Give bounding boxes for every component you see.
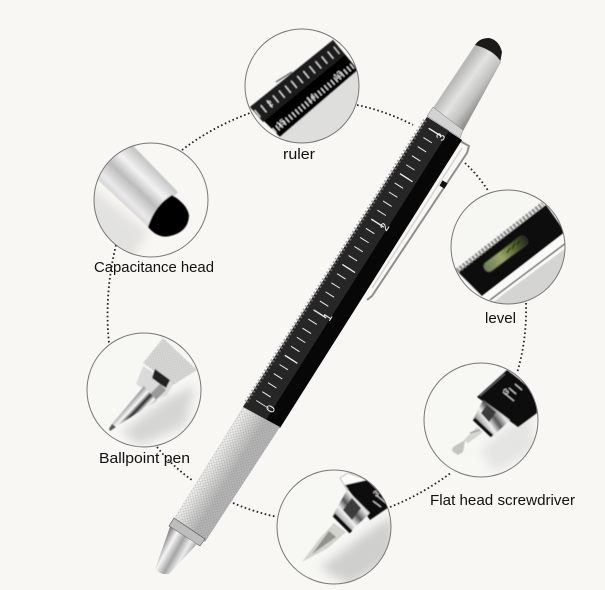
inset: level — [450, 190, 566, 304]
dotted connector ring — [108, 105, 526, 517]
black body — [243, 117, 462, 428]
pen — [155, 38, 502, 574]
inset: cross head screwdriver — [277, 470, 395, 585]
ruler numbers: 2 — [377, 220, 392, 233]
inset: ruler — [244, 28, 360, 144]
inset: capacitance head — [94, 142, 208, 258]
label: flat head screwdriver: Flat head screwdriver — [430, 493, 575, 509]
ruler face — [243, 117, 449, 420]
mottled edge — [245, 120, 425, 404]
knurled grip — [173, 407, 280, 542]
stylus tip — [474, 38, 502, 63]
label: level: level — [485, 311, 516, 327]
pen clip — [367, 141, 469, 300]
silver cap — [433, 45, 501, 131]
ruler numbers: 1 — [320, 310, 335, 323]
inset: ruler: 2 — [266, 98, 275, 109]
inset: ruler: 15 — [275, 117, 288, 130]
label: ruler: ruler — [283, 147, 315, 163]
inset: cross head screwdriver: 3 — [372, 488, 381, 499]
inset: ruler: 13 — [332, 69, 345, 82]
inset: flat head screwdriver — [424, 363, 538, 477]
ruler numbers: 3 — [433, 130, 448, 143]
inset: ballpoint pen — [87, 333, 201, 447]
ruler ticks — [261, 131, 435, 405]
grip ring — [169, 518, 205, 546]
ruler numbers — [263, 130, 448, 415]
inset: ruler: 14 — [305, 92, 318, 105]
label: ballpoint pen: Ballpoint pen — [99, 451, 190, 467]
ruler numbers: 0 — [263, 402, 278, 415]
inset: flat head screwdriver: 3 — [502, 386, 511, 397]
label: capacitance head: Capacitance head — [94, 260, 214, 276]
metal ring — [427, 107, 463, 138]
nose cone — [155, 527, 197, 574]
